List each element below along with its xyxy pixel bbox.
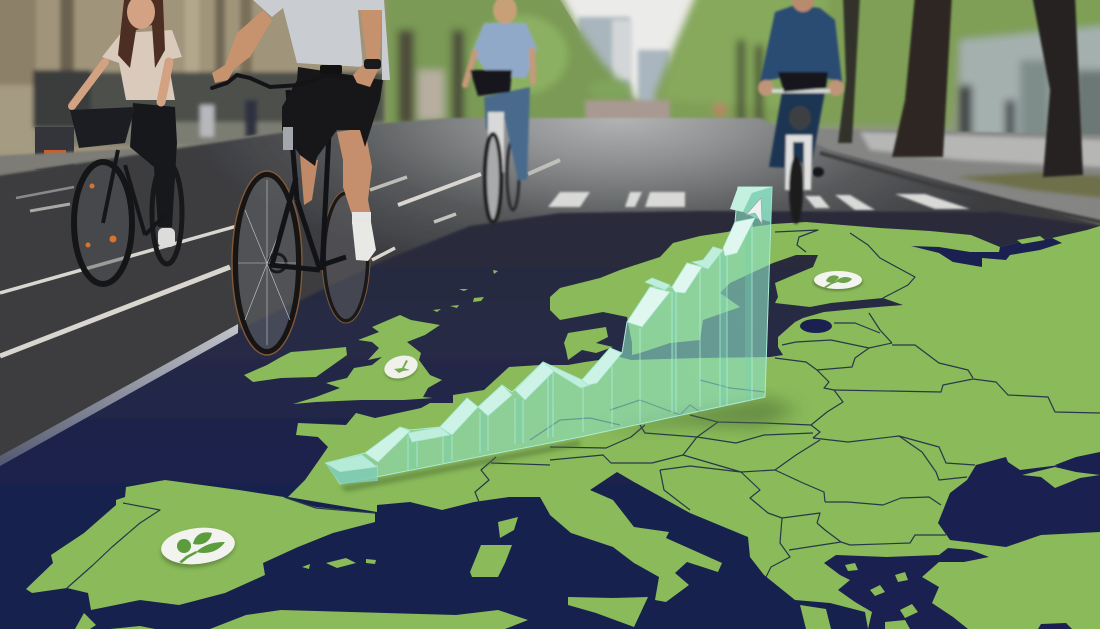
leaf icon: [394, 360, 410, 373]
lane markings: [0, 160, 560, 356]
left buildings: [0, 0, 390, 155]
battery: [283, 127, 293, 150]
head: [792, 0, 814, 12]
tree trunks: [838, 0, 1083, 177]
far pavement: [860, 132, 1100, 168]
Sicily: [568, 597, 648, 627]
frame: [488, 112, 504, 172]
chart arrow head block: [730, 187, 772, 212]
handlebar: [772, 89, 830, 93]
Peloponnese: [800, 605, 831, 629]
right arm: [353, 10, 382, 87]
continental Europe: [288, 222, 1100, 629]
shoe: [352, 222, 376, 261]
basket: [470, 70, 512, 96]
Balearic islands: [302, 558, 376, 569]
left shin behind frame: [300, 155, 318, 205]
cyclist: blurred man right: [758, 0, 844, 224]
wheel: [789, 156, 803, 224]
badge: Spain leaf: [159, 524, 237, 572]
basket: [70, 107, 135, 148]
glass column edges: [377, 220, 752, 481]
front wheel: [485, 134, 501, 222]
sock: [352, 212, 371, 224]
arms: [465, 50, 533, 85]
shoe: [812, 167, 824, 177]
shirt: [760, 5, 842, 82]
Sardinia: [470, 545, 512, 577]
rear wheel: [322, 191, 370, 323]
chart ribbon segments: [325, 218, 755, 472]
Ireland: [244, 347, 347, 382]
hands: [758, 80, 844, 96]
glass body: [326, 187, 772, 484]
arms: [72, 62, 169, 106]
left trees: [385, 0, 640, 130]
cyclist: man at centre-left foreground: [212, 0, 390, 355]
right foliage: [655, 0, 1100, 145]
front wheel: [74, 162, 132, 284]
jeans: [484, 87, 530, 180]
bike lane stripe: [0, 324, 238, 466]
wristwatch: [364, 59, 381, 69]
White Sea: [911, 238, 1062, 267]
white frame: [785, 135, 812, 190]
North Africa: [75, 610, 528, 629]
chart base shadow: [340, 440, 580, 492]
street bin: [35, 127, 74, 170]
jeans: [769, 92, 825, 168]
Black Sea: [938, 457, 1100, 547]
navy map base: [0, 211, 1100, 629]
Aegean Sea: [824, 548, 989, 629]
Denmark: [564, 327, 613, 360]
leaf icon: [177, 532, 225, 563]
leaf icon: [824, 275, 852, 288]
cyclist: woman on left: [70, 0, 182, 284]
torso: [102, 30, 182, 100]
front wheel: [232, 171, 302, 355]
distant traffic haze: [585, 100, 670, 122]
Crimea: [1022, 467, 1100, 488]
Iberia: [26, 480, 375, 610]
pants: [130, 103, 177, 227]
rear wheel: [152, 162, 182, 264]
right sidewalk: [800, 128, 1100, 230]
lower leg: [337, 128, 372, 215]
left arm: [212, 10, 272, 83]
head: [493, 0, 517, 24]
seas over the map: [800, 238, 1100, 629]
chart front face: [325, 463, 377, 484]
map of Europe: [26, 222, 1100, 629]
bike frame: [270, 90, 346, 270]
seat post: [789, 106, 811, 130]
shirt: [253, 0, 390, 80]
badge: UK leaf: [382, 352, 420, 384]
grass strip: [955, 172, 1100, 199]
badge: Finland leaf: [813, 271, 863, 291]
cyclist: blurred man centre: [465, 0, 537, 222]
3D growth chart: [325, 187, 772, 484]
glass side strips: [408, 220, 752, 470]
shorts: [282, 67, 383, 166]
chart cast shadow: [600, 397, 800, 430]
shoe: [158, 228, 175, 247]
kerb: [820, 153, 1100, 223]
Corsica: [498, 517, 518, 538]
Mediterranean south of Turkey: [1038, 623, 1072, 629]
arrow head side: [743, 187, 772, 222]
sky: [560, 0, 705, 105]
distant towers: [578, 17, 670, 105]
Great Britain: [293, 315, 442, 404]
Aegean islands: [845, 236, 1045, 629]
left sidewalk: [0, 128, 300, 176]
country borders: [67, 230, 1100, 588]
Sea of Azov: [1055, 452, 1100, 475]
shirt: [472, 23, 537, 78]
hair: [118, 0, 165, 68]
bike frame: [103, 150, 167, 235]
face: [127, 0, 155, 29]
rear wheel: [507, 140, 519, 210]
crosswalk dashes: [548, 192, 970, 210]
handlebars: [212, 75, 350, 88]
Gulf of Riga: [800, 319, 832, 333]
basket: [778, 72, 828, 92]
Scandinavia: [550, 224, 773, 355]
arrow cursor icon: [746, 198, 762, 224]
Scottish islets: [433, 270, 498, 312]
stem display: [320, 65, 342, 74]
